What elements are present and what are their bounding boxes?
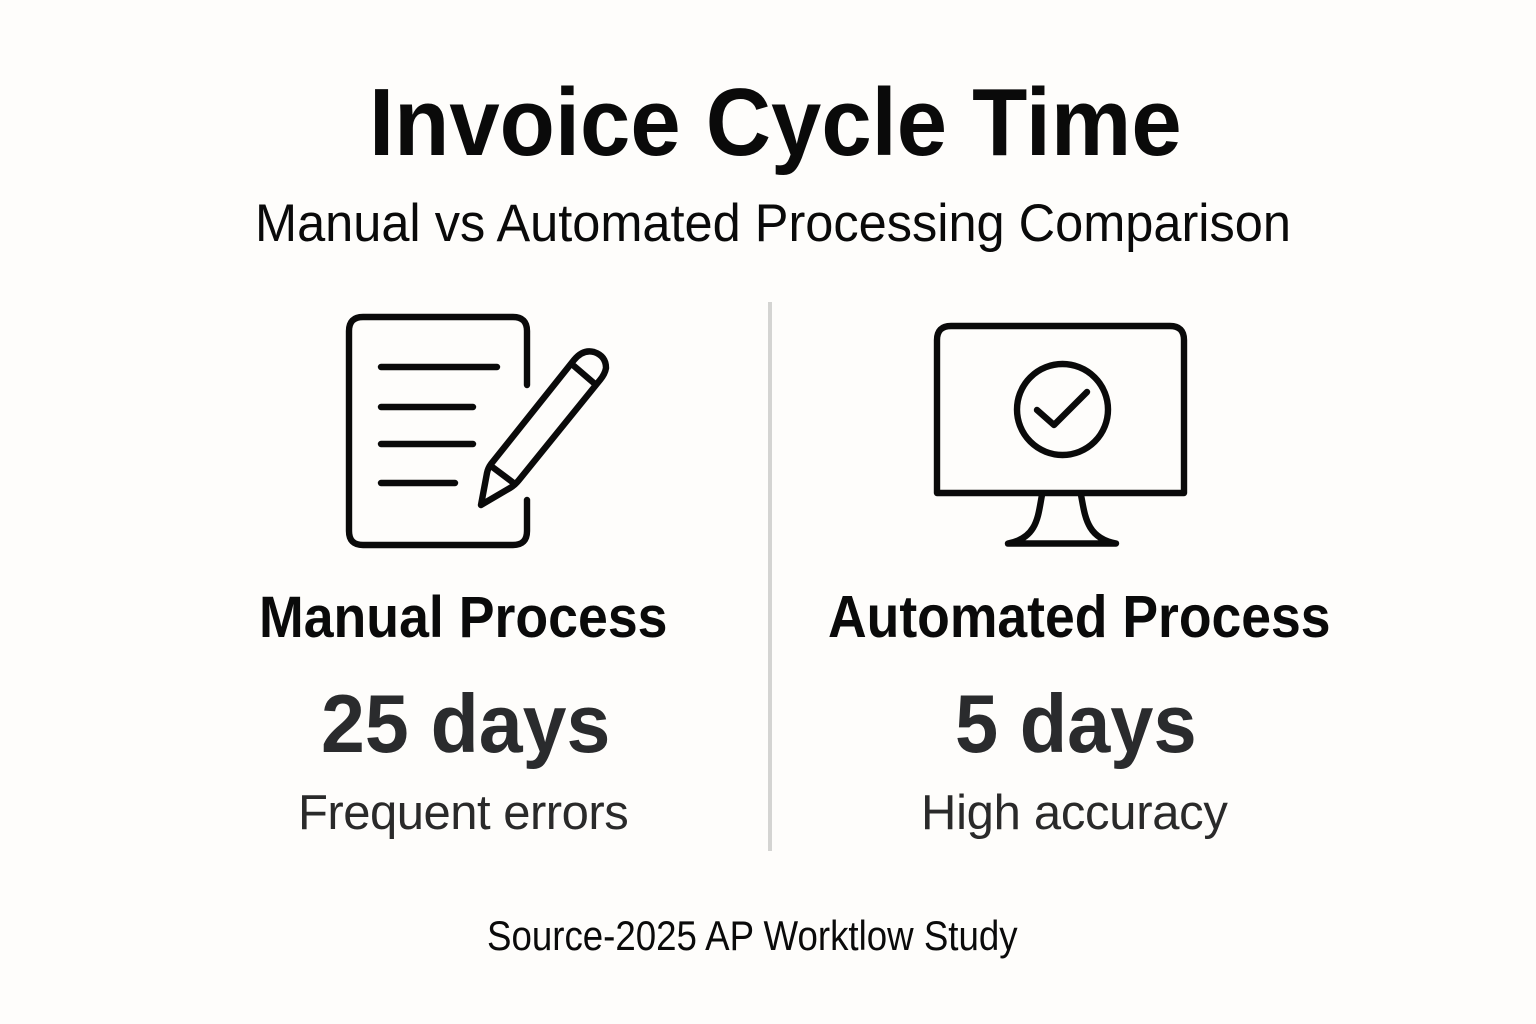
source line: Source-2025 AP Worktlow Study [487, 912, 1018, 959]
subtitle: Manual vs Automated Processing Comparison [255, 194, 1291, 253]
note: high accuracy: High accuracy [921, 786, 1228, 840]
stat: 25 days: 25 days [321, 677, 610, 770]
icon: monitor with check mark [934, 322, 1188, 547]
heading: manual process: Manual Process [259, 585, 668, 650]
stat: 5 days: 5 days [955, 677, 1197, 770]
divider [768, 302, 772, 851]
heading: automated process: Automated Process [828, 584, 1331, 650]
note: frequent errors: Frequent errors [298, 786, 628, 840]
title: Invoice Cycle Time [369, 69, 1182, 176]
icon: document with pencil [346, 314, 610, 548]
